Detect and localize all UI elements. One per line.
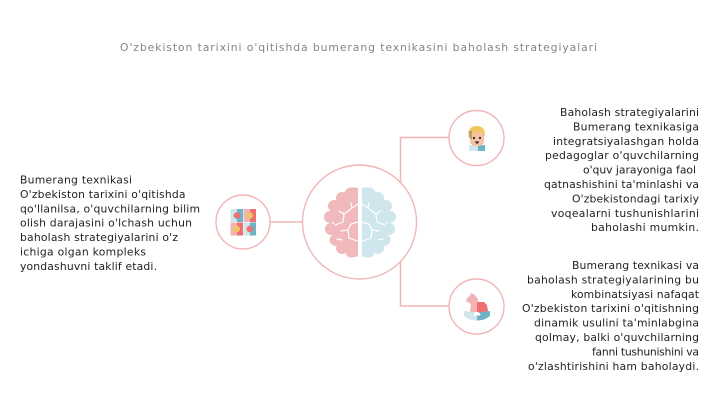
- right text block: top: o'quv jarayoniga faol: [583, 164, 696, 177]
- right text block: top: O'zbekistondagi tarixiy: [572, 192, 700, 205]
- right text block: bottom: kombinatsiyasi nafaqat: [571, 288, 699, 301]
- icon: brain: [324, 187, 396, 258]
- right text block: top: [544, 106, 700, 234]
- icon: rocking horse: [464, 293, 490, 320]
- right text block: top: pedagoglar o'quvchilarning: [545, 149, 699, 162]
- left text block: ichiga olgan kompleks: [20, 246, 146, 258]
- right text block: bottom: baholash strategiyalarining bu: [527, 273, 699, 286]
- left text block: [20, 174, 200, 273]
- icon: person: [468, 126, 485, 151]
- right text block: bottom: [522, 259, 699, 373]
- left circle with tile icon: [216, 195, 270, 249]
- right text block: bottom: fanni tushunishini va: [592, 345, 699, 358]
- left text block: baholash strategiyalarini o'z: [20, 231, 178, 244]
- left text block: O'zbekiston tarixini o'qitishda: [20, 188, 186, 201]
- title: O'zbekiston tarixini o'qitishda bumerang texnikasini baholash strategiyalari: [120, 41, 597, 54]
- top right circle with person icon: [449, 110, 504, 166]
- right text block: top: baholashi mumkin.: [591, 221, 699, 234]
- right text block: top: integratsiyalashgan holda: [553, 135, 699, 148]
- right text block: top: Bumerang texnikasiga: [573, 120, 699, 133]
- right text block: bottom: dinamik usulini ta'minlabgina: [534, 317, 699, 330]
- central circle with brain: [302, 165, 416, 279]
- right text block: bottom: O'zbekiston tarixini o'qitishning: [522, 302, 699, 315]
- left text block: Bumerang texnikasi: [20, 174, 132, 186]
- right text block: bottom: o'zlashtirishini ham baholaydi.: [528, 360, 699, 373]
- right text block: top: qatnashishini ta'minlashi va: [544, 178, 699, 191]
- left text block: qo'llanilsa, o'quvchilarning bilim: [20, 202, 200, 215]
- bottom right circle with rocking horse icon: [449, 279, 504, 334]
- right text block: top: voqealarni tushunishlarini: [551, 207, 699, 220]
- right text block: bottom: Bumerang texnikasi va: [572, 259, 699, 272]
- right text block: bottom: qolmay, balki o'quvchilarning: [535, 331, 699, 344]
- left text block: olish darajasini o'lchash uchun: [20, 217, 192, 230]
- left text block: yondashuvni taklif etadi.: [20, 260, 157, 273]
- connector lines: [270, 138, 449, 306]
- right text block: top: Baholash strategiyalarini: [560, 106, 699, 119]
- icon: four tiles: [230, 209, 256, 236]
